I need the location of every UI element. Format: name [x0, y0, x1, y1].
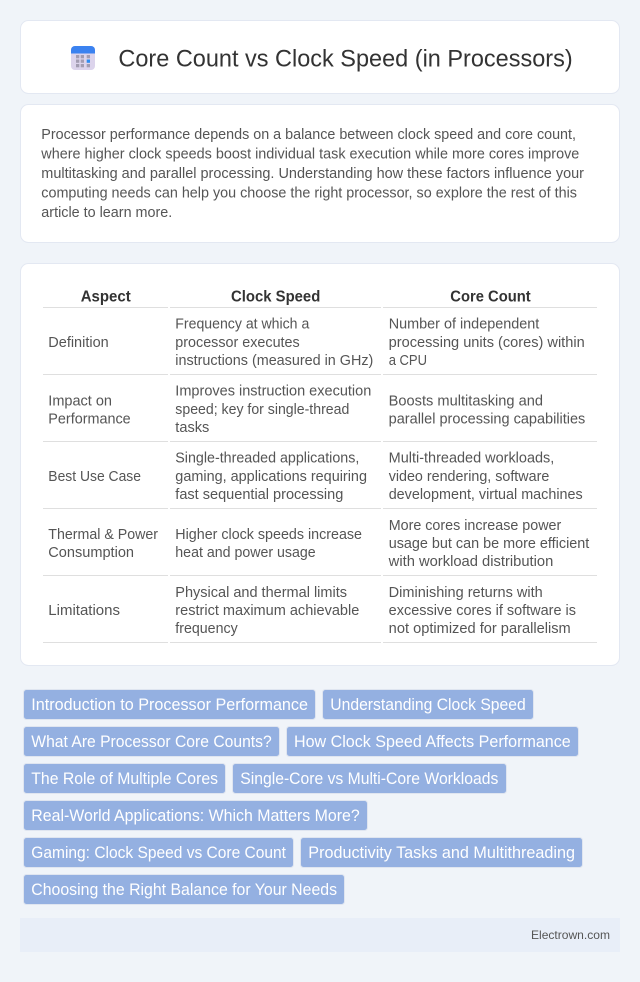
- table row: Impact on Performance: tasks: [175, 420, 209, 436]
- table row: Best Use Case: video rendering, software: [389, 469, 549, 485]
- topic tags: [24, 690, 582, 904]
- icon: processor calendar grid: [71, 46, 95, 70]
- table row: Limitations: frequency: [175, 621, 238, 637]
- tag: Single-Core vs Multi-Core Workloads: [232, 764, 506, 794]
- table row: Best Use Case: development, virtual machines: [389, 487, 583, 503]
- tag: The Role of Multiple Cores: [24, 764, 226, 794]
- tag: Single-Core vs Multi-Core Workloads: Single-Core vs Multi-Core Workloads: [240, 770, 498, 788]
- table row: Thermal and Power Consumption: Higher clock speeds increase: [175, 527, 362, 543]
- table row: Best Use Case: Best Use Case: [48, 469, 141, 485]
- table row: Limitations: Physical and thermal limits: [175, 585, 347, 601]
- table row: Best Use Case: Multi-threaded workloads,: [389, 451, 554, 467]
- tag: Real-World Applications: Which Matters More?: [24, 800, 368, 830]
- tag: Productivity Tasks and Multithreading: [300, 838, 582, 868]
- tag: Gaming: Clock Speed vs Core Count: [24, 838, 294, 868]
- tag: Introduction to Processor Performance: Introduction to Processor Performance: [31, 696, 308, 714]
- tag: What Are Processor Core Counts?: What Are Processor Core Counts?: [31, 733, 272, 751]
- tag: Introduction to Processor Performance: [24, 690, 316, 720]
- table row: Impact on Performance: Boosts multitasking and: [389, 393, 543, 409]
- panel: comparison table: [20, 264, 620, 666]
- table row: Impact on Performance: Improves instruction execution: [175, 384, 371, 400]
- table row: Definition: Frequency at which a: [175, 317, 309, 333]
- intro text block: multitasking and parallel processing. Understanding how these factors influence your: [41, 166, 584, 182]
- table row: Definition: Number of independent: [389, 317, 539, 333]
- footer bar: [20, 918, 620, 952]
- table row: Definition: processor executes: [175, 335, 300, 351]
- tag: Understanding Clock Speed: [322, 690, 534, 720]
- table row: Thermal and Power Consumption: More cores increase power: [389, 518, 562, 534]
- table row: Thermal and Power Consumption: usage but can be more efficient: [389, 536, 589, 552]
- tag: The Role of Multiple Cores: The Role of Multiple Cores: [31, 770, 218, 788]
- table row: Limitations: not optimized for parallelism: [389, 621, 571, 637]
- tag: Gaming: Clock Speed vs Core Count: Gaming: Clock Speed vs Core Count: [31, 844, 286, 862]
- tag: Choosing the Right Balance for Your Needs: Choosing the Right Balance for Your Needs: [31, 881, 337, 899]
- table row: Definition: instructions (measured in GHz): [175, 353, 373, 369]
- table row: Thermal and Power Consumption: Consumption: [48, 545, 134, 561]
- table row: Limitations: Diminishing returns with: [389, 585, 543, 601]
- table row: Thermal and Power Consumption: heat and power usage: [175, 545, 316, 561]
- table row: Thermal and Power Consumption: [43, 518, 597, 576]
- tag: How Clock Speed Affects Performance: [286, 726, 578, 756]
- table row: Definition: a CPU: [389, 353, 427, 369]
- table header row: [43, 289, 597, 308]
- table row: Impact on Performance: [43, 384, 597, 442]
- table row: Impact on Performance: Performance: [48, 411, 131, 427]
- table header row: Clock Speed: [231, 289, 320, 306]
- table row: Impact on Performance: parallel processing capabilities: [389, 411, 585, 427]
- table row: Limitations: excessive cores if software is: [389, 603, 576, 619]
- table row: Best Use Case: gaming, applications requiring: [175, 469, 367, 485]
- tag: How Clock Speed Affects Performance: How Clock Speed Affects Performance: [294, 733, 571, 751]
- table row: Best Use Case: Single-threaded applications,: [175, 451, 359, 467]
- tag: Productivity Tasks and Multithreading: Productivity Tasks and Multithreading: [308, 844, 575, 862]
- title: Core Count vs Clock Speed (in Processors): [118, 46, 573, 73]
- intro text block: where higher clock speeds boost individual task execution while more cores improve: [40, 147, 579, 163]
- table row: Impact on Performance: speed; key for single-thread: [175, 402, 349, 418]
- intro text block: article to learn more.: [41, 205, 172, 221]
- panel: introduction: [20, 104, 620, 242]
- footer credit: Electrown.com: [531, 928, 610, 942]
- table row: Limitations: [43, 585, 597, 643]
- tag: Choosing the Right Balance for Your Needs: [24, 874, 344, 904]
- table row: Best Use Case: fast sequential processing: [175, 487, 343, 503]
- table row: Definition: [43, 317, 597, 375]
- table header row: Aspect: [81, 289, 131, 306]
- table header row: Core Count: [450, 289, 531, 306]
- table row: Limitations: restrict maximum achievable: [175, 603, 359, 619]
- tag: What Are Processor Core Counts?: [24, 726, 280, 756]
- table row: Thermal and Power Consumption: with workload distribution: [388, 554, 553, 570]
- table row: Definition: Definition: [48, 335, 109, 351]
- panel: title card: [20, 20, 620, 94]
- table row: Best Use Case: [43, 451, 597, 509]
- table row: Definition: processing units (cores) within: [389, 335, 585, 351]
- intro text block: [40, 127, 584, 221]
- intro text block: computing needs can help you choose the right processor, so explore the rest of this: [41, 186, 577, 202]
- table row: Impact on Performance: Impact on: [48, 393, 112, 409]
- tag: Understanding Clock Speed: Understanding Clock Speed: [330, 696, 526, 714]
- tag: Real-World Applications: Which Matters More?: Real-World Applications: Which Matters More?: [31, 807, 360, 825]
- table row: Thermal and Power Consumption: Thermal & Power: [48, 527, 158, 543]
- intro text block: Processor performance depends on a balance between clock speed and core count,: [41, 127, 576, 143]
- table row: Limitations: Limitations: [48, 603, 120, 619]
